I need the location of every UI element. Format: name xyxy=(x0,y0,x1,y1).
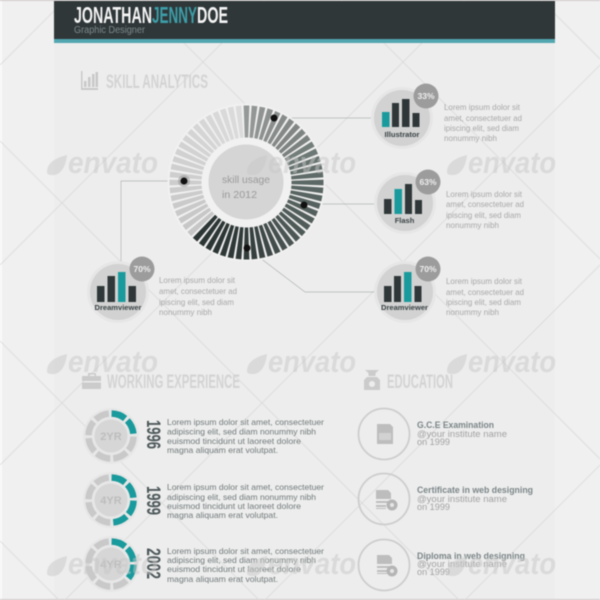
percent badge: 70% xyxy=(419,264,437,274)
bars xyxy=(384,272,422,302)
donut marker dots xyxy=(178,114,308,252)
icon: document xyxy=(358,408,410,460)
text: 2002 description: Lorem ipsum dolor sit amet, consectetuer xyxy=(167,546,324,556)
text: 2002 description: euismod tincidunt ut laoreet dolore xyxy=(167,564,301,574)
chart: skill usage donut xyxy=(168,104,326,262)
ring label: 2YR xyxy=(100,431,122,443)
text: 1999 description xyxy=(167,482,324,520)
donut centre label: skill usage xyxy=(222,174,270,186)
heading: education: EDUCATION xyxy=(387,371,453,393)
text: Illustrator description: ipiscing elit, sed diam xyxy=(444,123,519,133)
text: Dreamviewer right description: nonummy nibh xyxy=(446,307,499,317)
text: Dreamviewer left description xyxy=(159,275,237,317)
ring label: 4YR xyxy=(100,495,122,507)
text: 2002 description xyxy=(167,546,324,584)
text: Dreamviewer right description: Lorem ipsum dolor sit xyxy=(446,276,523,286)
text: 1999 description: euismod tincidunt ut laoreet dolore xyxy=(167,501,301,511)
experience ring: 2002 xyxy=(83,536,139,592)
icon: bar chart xyxy=(81,71,98,90)
year: 2002: 2002 xyxy=(142,548,163,579)
bars xyxy=(384,184,422,214)
text: Illustrator description: amet, consectetuer ad xyxy=(444,113,522,123)
ring label: 4YR xyxy=(100,559,122,571)
text: Dreamviewer left description: amet, consectetuer ad xyxy=(159,286,237,296)
text: Illustrator description: nonummy nibh xyxy=(444,133,497,143)
text: 2002 description: magna aliquam erat volutpat. xyxy=(167,574,278,584)
connector lines xyxy=(121,118,380,292)
text: Dreamviewer left description: nonummy nibh xyxy=(159,307,212,317)
education text: on 1999 xyxy=(417,567,450,577)
label: Flash xyxy=(395,216,415,225)
text: Dreamviewer left description: ipiscing elit, sed diam xyxy=(159,297,234,307)
panel: header band xyxy=(54,1,555,43)
text: Flash description xyxy=(446,189,524,230)
header name: DOE xyxy=(197,2,228,28)
icon: briefcase xyxy=(82,373,101,389)
text: 2002 description: adipiscing elit, sed diam nonummy nibh xyxy=(167,555,316,565)
skill: Flash xyxy=(374,170,440,234)
bars xyxy=(97,272,136,302)
text: 1996 description: magna aliquam erat volutpat. xyxy=(167,445,278,455)
heading: education xyxy=(364,370,453,393)
year: 1996: 1996 xyxy=(142,420,163,449)
text: 1999 description: adipiscing elit, sed diam nonummy nibh xyxy=(167,492,316,502)
education: Certificate in web designing xyxy=(358,474,533,524)
text: Illustrator description: Lorem ipsum dolor sit xyxy=(444,102,521,112)
envato watermarks: envato xyxy=(268,344,356,379)
heading: working experience: WORKING EXPERIENCE xyxy=(107,371,240,393)
experience ring: 1999 xyxy=(83,472,139,528)
envato watermarks: envato xyxy=(468,344,556,379)
text: 1996 description: adipiscing elit, sed diam nonummy nibh xyxy=(167,426,316,436)
percent badge: 63% xyxy=(419,177,437,187)
header name: JENNY xyxy=(152,2,197,28)
envato watermarks: envato xyxy=(68,145,158,180)
envato watermarks: envato xyxy=(268,546,356,581)
envato watermarks: envato xyxy=(68,344,158,379)
education: G.C.E Examination xyxy=(358,408,507,460)
text: Flash description: amet, consectetuer ad xyxy=(446,199,524,209)
envato watermarks: envato xyxy=(468,145,556,180)
heading: skill analytics xyxy=(81,71,208,93)
text: Flash description: Lorem ipsum dolor sit xyxy=(446,189,523,199)
icon: graduation cap xyxy=(364,370,380,390)
envato watermarks xyxy=(47,145,556,581)
heading: skill analytics: SKILL ANALYTICS xyxy=(106,71,208,93)
header job title: Graphic Designer xyxy=(74,25,146,36)
text: Dreamviewer left description: Lorem ipsum dolor sit xyxy=(159,275,236,285)
skill: Dreamviewer left xyxy=(87,256,154,323)
envato watermarks: envato xyxy=(268,145,356,180)
skill: Dreamviewer right xyxy=(374,256,440,323)
donut centre label: in 2012 xyxy=(222,189,257,201)
education text xyxy=(417,551,525,577)
envato watermarks: envato xyxy=(468,546,556,581)
education text: @your institute name xyxy=(417,494,507,504)
text: 1996 description: Lorem ipsum dolor sit amet, consectetuer xyxy=(167,417,324,427)
education text: Diploma in web designing xyxy=(417,551,525,561)
label: Dreamviewer xyxy=(94,303,142,312)
text: 1999 description: magna aliquam erat volutpat. xyxy=(167,510,278,520)
envato watermarks: envato xyxy=(68,546,158,581)
education text: on 1999 xyxy=(417,437,450,447)
text: Illustrator description xyxy=(444,102,522,143)
header name: JONATHAN xyxy=(74,2,152,28)
heading: working experience xyxy=(82,371,240,393)
text: Dreamviewer right description: ipiscing elit, sed diam xyxy=(446,297,521,307)
text: Dreamviewer right description: amet, consectetuer ad xyxy=(446,287,524,297)
skill: Illustrator xyxy=(371,84,438,149)
education: Diploma in web designing xyxy=(358,540,525,590)
text: Dreamviewer right description xyxy=(446,276,524,317)
text: Flash description: nonummy nibh xyxy=(446,220,499,230)
percent badge: 33% xyxy=(417,91,435,101)
text: Flash description: ipiscing elit, sed diam xyxy=(446,210,521,220)
education text: @your institute name xyxy=(417,429,507,439)
education text: G.C.E Examination xyxy=(417,420,494,430)
education text xyxy=(417,420,507,447)
experience ring: 1996 xyxy=(83,408,139,464)
education text: on 1999 xyxy=(417,502,450,512)
icon: certificate document xyxy=(358,474,410,524)
text: 1996 description: euismod tincidunt ut laoreet dolore xyxy=(167,436,301,446)
text: 1996 description xyxy=(167,417,324,455)
year: 1999: 1999 xyxy=(142,486,163,515)
percent badge: 70% xyxy=(133,264,151,274)
icon: diploma document xyxy=(358,540,410,590)
label: Dreamviewer xyxy=(381,303,428,312)
education text xyxy=(417,485,533,512)
education text: Certificate in web designing xyxy=(417,485,533,495)
label: Illustrator xyxy=(384,130,420,139)
bars xyxy=(382,99,420,127)
text: 1999 description: Lorem ipsum dolor sit amet, consectetuer xyxy=(167,482,324,492)
education text: @your institute name xyxy=(417,559,507,569)
